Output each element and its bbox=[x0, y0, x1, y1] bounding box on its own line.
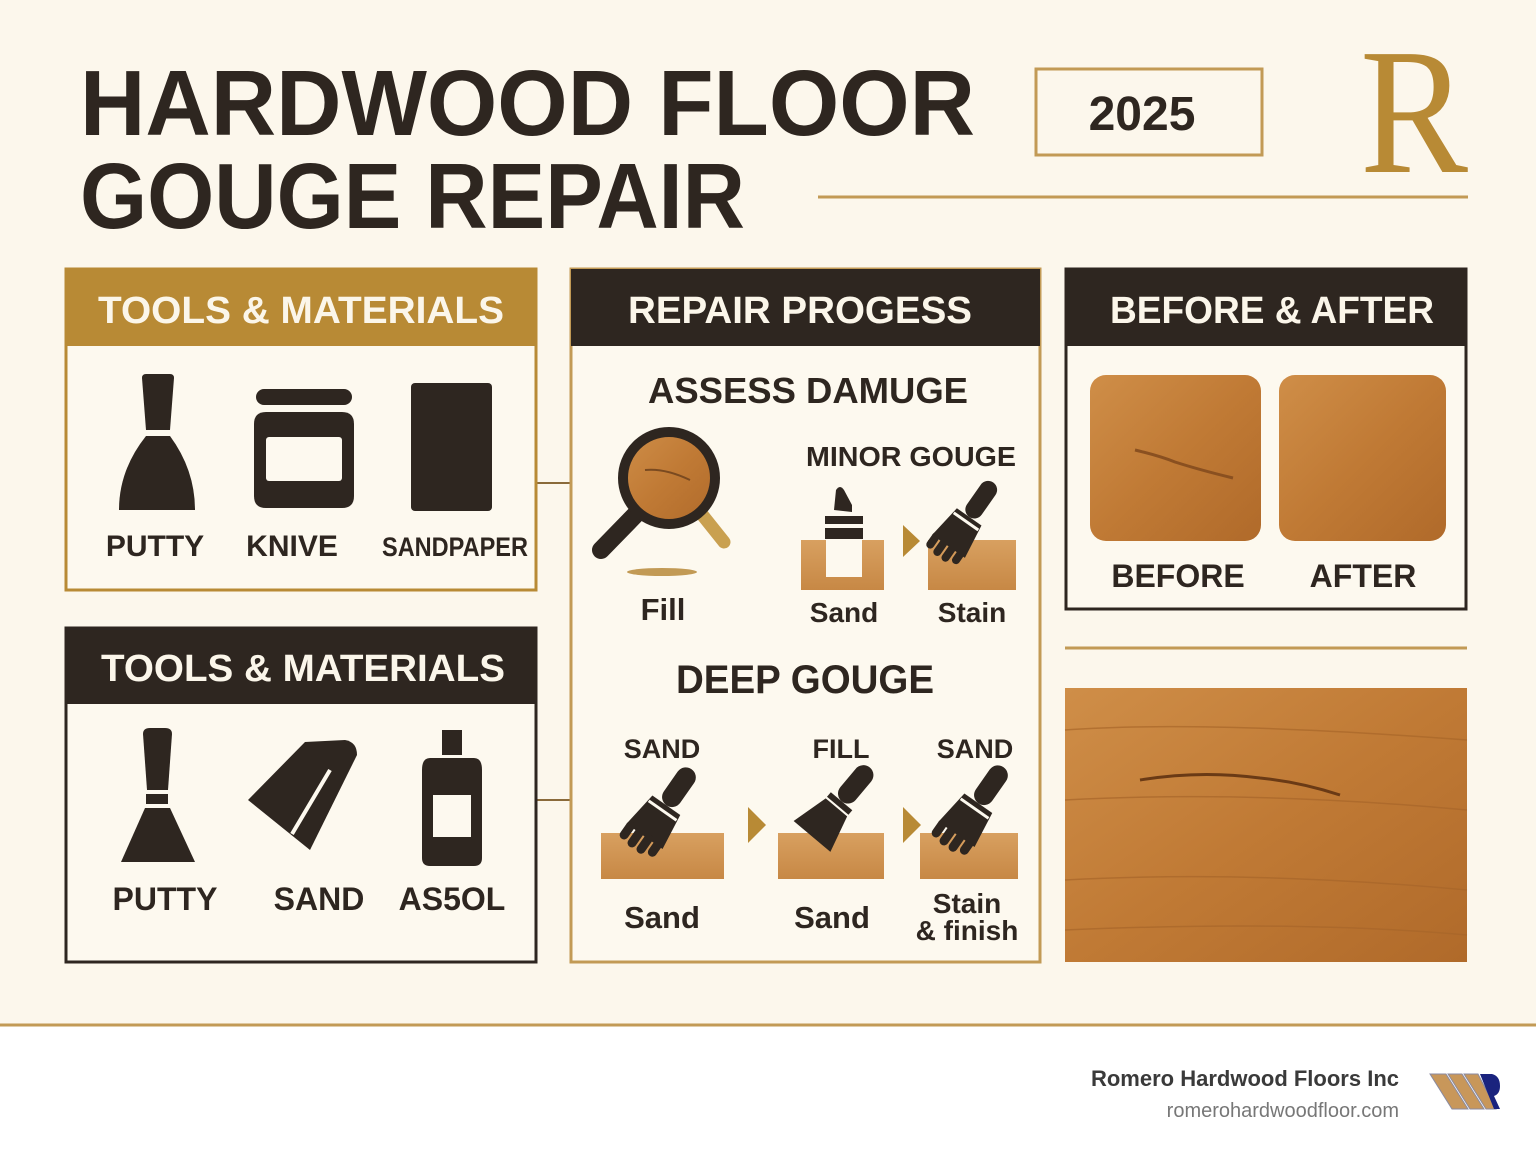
panel: repair progess: SAND bbox=[937, 734, 1013, 764]
icon: magnifier bbox=[601, 432, 724, 576]
panel: repair progess: REPAIR PROGESS bbox=[628, 290, 972, 332]
connectors bbox=[537, 483, 570, 800]
panel: tools & materials 1: TOOLS & MATERIALS bbox=[98, 290, 504, 332]
panel: tools & materials 1: PUTTY bbox=[106, 530, 204, 563]
panel: repair progess: Stain bbox=[938, 597, 1006, 628]
panel: repair progess: Sand bbox=[624, 900, 700, 935]
panel: repair progess: Fill bbox=[641, 592, 685, 627]
panel: tools & materials 1: SANDPAPER bbox=[382, 532, 528, 562]
before swatch bbox=[1090, 375, 1261, 541]
panel: tools & materials 2: AS5OL bbox=[399, 881, 505, 917]
logo: R monogram: R bbox=[1360, 12, 1468, 211]
panel: before & after: BEFORE & AFTER bbox=[1110, 290, 1434, 332]
icon: jar bbox=[254, 389, 354, 508]
icon: sanding block bbox=[248, 740, 357, 850]
panel: repair progess: MINOR GOUGE bbox=[806, 441, 1016, 472]
footer bbox=[0, 1025, 1536, 1154]
icon: stain plank with brush bbox=[924, 471, 1016, 590]
panel: tools & materials 1: KNIVE bbox=[246, 530, 338, 563]
arrow bbox=[903, 525, 920, 557]
icon: sand plank with putty bbox=[801, 487, 884, 590]
title: GOUGE REPAIR bbox=[80, 144, 745, 248]
panel: before & after bbox=[1066, 269, 1466, 609]
panel: tools & materials 2: PUTTY bbox=[113, 881, 217, 917]
panel: before & after: BEFORE bbox=[1111, 558, 1245, 594]
title: HARDWOOD FLOOR bbox=[80, 51, 975, 155]
step: sand bbox=[601, 757, 724, 879]
footer: Romero Hardwood Floors Inc bbox=[1091, 1066, 1399, 1091]
panel: repair progess: SAND bbox=[624, 734, 700, 764]
title bbox=[80, 51, 975, 248]
panel: repair progess: Sand bbox=[794, 900, 870, 935]
heading: deep gouge: DEEP GOUGE bbox=[676, 658, 934, 702]
icon: sandpaper bbox=[411, 383, 492, 511]
logo: romero bbox=[1430, 1074, 1500, 1109]
icon: putty knife 2 bbox=[121, 728, 195, 862]
panel: tools & materials 2: SAND bbox=[274, 881, 364, 917]
panel: repair progess: Stain bbox=[933, 888, 1001, 919]
icon: putty knife bbox=[119, 374, 195, 510]
panel: tools & materials 2 bbox=[66, 628, 536, 962]
year box bbox=[1036, 69, 1262, 155]
panel: tools & materials 1 bbox=[66, 269, 536, 590]
wood close-up panel bbox=[1065, 688, 1467, 962]
panel: before & after: AFTER bbox=[1310, 558, 1416, 594]
panel: repair progess: FILL bbox=[813, 734, 869, 764]
step: fill bbox=[778, 752, 888, 879]
footer: romerohardwoodfloor.com bbox=[1167, 1100, 1399, 1122]
panel: repair progess: & finish bbox=[916, 915, 1018, 946]
panel: repair progess bbox=[571, 269, 1040, 962]
panel: tools & materials 2: TOOLS & MATERIALS bbox=[101, 648, 505, 690]
step: stain & finish bbox=[920, 755, 1022, 879]
icon: bottle bbox=[422, 730, 482, 866]
after swatch bbox=[1279, 375, 1446, 541]
heading: assess damuge: ASSESS DAMUGE bbox=[648, 370, 968, 411]
year box: 2025 bbox=[1089, 88, 1195, 141]
panel: repair progess: Sand bbox=[810, 597, 878, 628]
